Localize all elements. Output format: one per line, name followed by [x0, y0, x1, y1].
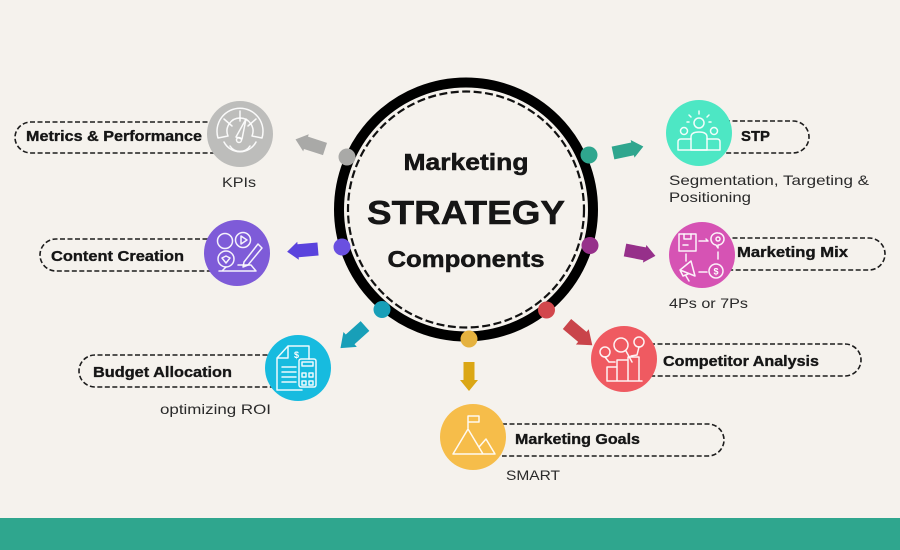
caption: 4Ps or 7Ps: 4Ps or 7Ps — [669, 295, 748, 311]
caption: Segmentation, Targeting and Positioning: Segmentation, Targeting & — [669, 172, 870, 188]
panel: Budget Allocation — [79, 335, 331, 417]
ring node: Marketing Goals — [460, 330, 478, 348]
heading: STP: STP — [741, 128, 770, 145]
label pill: Marketing Goals — [502, 424, 724, 456]
ring node: Competitor Analysis — [538, 302, 555, 318]
ring node: KPIs — [338, 148, 356, 166]
label pill: Budget Allocation — [79, 355, 275, 387]
label pill: STP — [725, 121, 809, 153]
caption: KPIs: KPIs — [222, 174, 256, 190]
ring node: Marketing Mix — [582, 237, 598, 254]
heading: Marketing Goals: Marketing Goals — [515, 431, 640, 448]
heading: Marketing Mix: Marketing Mix — [737, 244, 849, 261]
panel: Marketing Mix — [669, 222, 885, 311]
icon: audience segments — [666, 100, 732, 166]
caption: optimizing ROI: optimizing ROI — [160, 401, 271, 417]
arrow: to STP — [611, 138, 645, 162]
heading: Competitor Analysis: Competitor Analysis — [663, 353, 819, 370]
panel: Metrics and Performance — [15, 101, 273, 190]
panel: Marketing Goals — [440, 404, 724, 483]
icon: KPI gauge — [207, 101, 273, 167]
heading: Content Creation: Content Creation — [51, 248, 184, 265]
caption: Segmentation, Targeting and Positioning: Positioning — [669, 189, 751, 205]
arrow: to Competitor Analysis — [561, 316, 599, 353]
caption: Segmentation, Targeting and Positioning — [669, 172, 870, 205]
footer band — [0, 518, 900, 550]
arrow: to KPIs — [293, 131, 328, 158]
heading: Metrics and Performance: Metrics & Performance — [26, 128, 202, 145]
central title: STRATEGY — [367, 194, 565, 231]
ring node: Budget Allocation — [374, 301, 390, 318]
arrow: to Content Creation — [286, 240, 319, 261]
central title: Marketing — [404, 149, 528, 175]
label pill: Metrics and Performance — [15, 122, 215, 153]
panel: Competitor Analysis — [591, 326, 861, 392]
icon: mountain flag — [440, 404, 506, 470]
icon: budget calculator: $ — [294, 350, 299, 360]
panel: Content Creation — [40, 220, 270, 286]
arrow: to Marketing Mix — [623, 241, 657, 265]
ring node: Content Creation — [334, 238, 350, 256]
icon: marketing mix cycle: $ — [713, 266, 719, 276]
icon: content creation — [204, 220, 270, 286]
ring node: STP — [580, 146, 598, 164]
icon: competitor chart — [591, 326, 657, 392]
icon: budget calculator — [265, 335, 331, 401]
central title: Components — [388, 246, 544, 272]
arrow: to Budget Allocation — [334, 319, 372, 356]
central ring — [339, 82, 593, 336]
icon: marketing mix cycle — [669, 222, 735, 288]
label pill: Content Creation — [40, 239, 215, 271]
heading: Budget Allocation: Budget Allocation — [93, 364, 232, 381]
caption: SMART: SMART — [506, 467, 560, 483]
label pill: Marketing Mix — [725, 238, 885, 270]
central title — [367, 149, 565, 272]
arrow: to Marketing Goals — [460, 362, 478, 391]
label pill: Competitor Analysis — [650, 344, 861, 376]
panel: STP — [666, 100, 870, 205]
